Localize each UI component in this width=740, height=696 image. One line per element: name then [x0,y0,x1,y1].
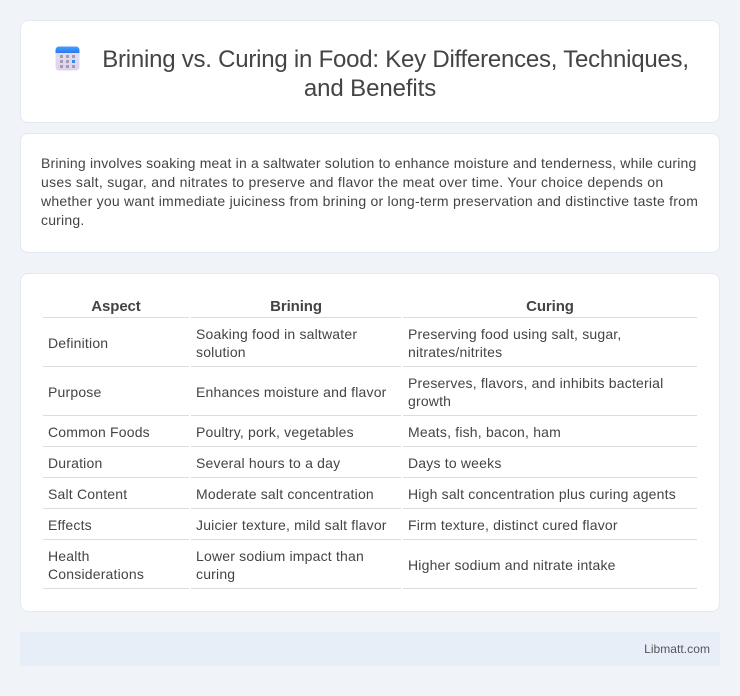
title [102,46,689,102]
table rows text: Common Foods [48,424,150,440]
intro text: uses salt, sugar, and nitrates to preserve and flavor the meat over time. Your choice depends on [41,174,663,190]
table panel [20,273,720,612]
table rows text: Health [48,548,90,564]
table rows text: Several hours to a day [196,455,340,471]
table rows text: Poultry, pork, vegetables [196,424,354,440]
intro text [41,155,698,228]
intro text: curing. [41,212,84,228]
table rows text: Preserves, flavors, and inhibits bacterial [408,375,663,391]
title: and Benefits [304,75,436,102]
table rows text: solution [196,344,246,360]
footer bar [20,632,720,666]
title: Brining vs. Curing in Food: Key Differences, Techniques, [102,46,689,73]
table rows text: Salt Content [48,486,127,502]
table header: Aspect [91,298,141,315]
table rows text: Moderate salt concentration [196,486,374,502]
table rows text: Preserving food using salt, sugar, [408,326,621,342]
table rows text: Purpose [48,384,101,400]
table rows text: Lower sodium impact than [196,548,364,564]
table rows text: Meats, fish, bacon, ham [408,424,561,440]
table rows text: Considerations [48,566,144,582]
table header: Curing [526,298,574,315]
table rows text: Juicier texture, mild salt flavor [196,517,387,533]
table rows text: Firm texture, distinct cured flavor [408,517,618,533]
intro panel [20,133,720,253]
header card [20,20,720,123]
table rows text: growth [408,393,451,409]
table rows text: Duration [48,455,102,471]
table rows text: Definition [48,335,108,351]
table rows text: Higher sodium and nitrate intake [408,557,616,573]
intro text: Brining involves soaking meat in a saltwater solution to enhance moisture and tenderness, while curing [41,155,696,171]
table rows text: curing [196,566,235,582]
intro text: whether you want immediate juiciness from brining or long-term preservation and distinctive taste from [41,193,698,209]
table header: Brining [270,298,322,315]
table rows text: Soaking food in saltwater [196,326,357,342]
footer text: Libmatt.com [644,642,710,656]
table rows text: High salt concentration plus curing agents [408,486,676,502]
table rows text: Enhances moisture and flavor [196,384,387,400]
comparison table [91,298,574,315]
table header [91,298,574,315]
table rows text: Days to weeks [408,455,502,471]
table rows text: nitrates/nitrites [408,344,502,360]
table rows text: Effects [48,517,92,533]
icon: calendar [56,46,80,70]
